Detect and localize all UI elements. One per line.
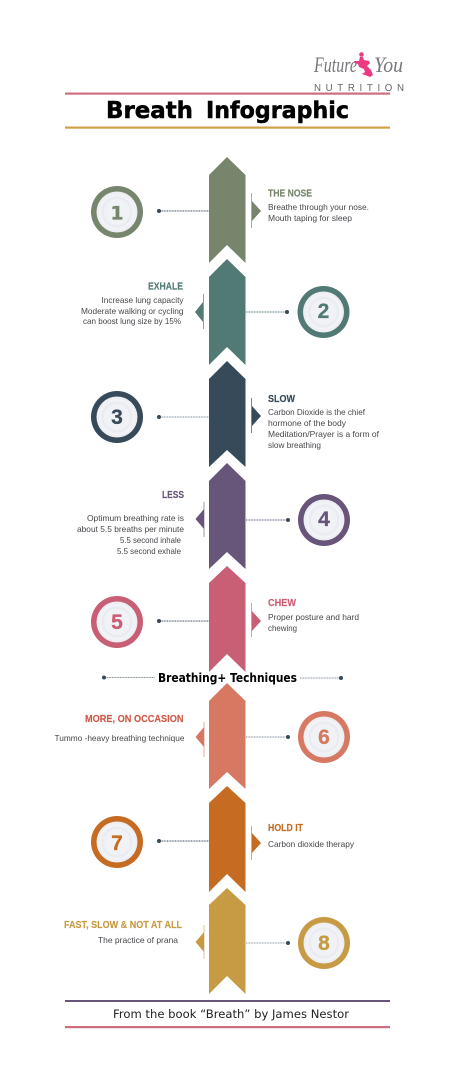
- step 1: the nose: Mouth taping for sleep: [268, 213, 352, 223]
- step 5: chew: CHEW: [268, 598, 297, 609]
- step 4: less: 5.5 second inhale: [120, 535, 181, 545]
- step 2: exhale: can boost lung size by 15%: [83, 316, 182, 326]
- step 6: more, on occasion: 6: [318, 726, 330, 749]
- logo: Future You Nutrition: Future: [313, 52, 357, 77]
- logo: Future You Nutrition: NUTRITION: [314, 83, 404, 94]
- footer source text: From the book “Breath” by James Nestor: [113, 1007, 349, 1021]
- step 2: exhale: Increase lung capacity: [102, 295, 184, 305]
- step 4: less: Optimum breathing rate is: [87, 513, 184, 523]
- title: Breath: [106, 98, 193, 124]
- step 3: slow: slow breathing: [268, 440, 321, 450]
- logo: Future You Nutrition: You: [374, 52, 403, 77]
- step 7: hold it: HOLD IT: [268, 823, 303, 834]
- footer top rule: [65, 1000, 390, 1002]
- step 4: less: LESS: [162, 490, 184, 501]
- title: Infographic: [206, 98, 349, 124]
- step 6: more, on occasion: [54, 711, 350, 763]
- step 2: exhale: Moderate walking or cycling: [81, 306, 184, 316]
- step 3: slow: Meditation/Prayer is a form of: [268, 429, 380, 439]
- footer bottom rule: [65, 1026, 390, 1028]
- top rule: [65, 92, 390, 95]
- step 5: chew: [91, 596, 359, 648]
- step 7: hold it: 7: [111, 832, 123, 855]
- step 6: more, on occasion: Tummo -heavy breathing technique: [54, 733, 185, 743]
- title rule: [65, 126, 390, 129]
- title: [106, 98, 349, 124]
- step 3: slow: 3: [111, 406, 123, 429]
- step 5: chew: chewing: [268, 623, 297, 633]
- chevron column: [209, 157, 246, 994]
- step 4: less: 5.5 second exhale: [117, 546, 181, 556]
- step 1: the nose: 1: [110, 202, 124, 224]
- step 1: the nose: Breathe through your nose.: [268, 202, 369, 212]
- step 3: slow: Carbon Dioxide is the chief: [268, 407, 366, 417]
- section heading: breathing techniques: Breathing+ Techniques: [158, 671, 297, 685]
- step 4: less: about 5.5 breaths per minute: [77, 524, 184, 534]
- step 8: fast, slow and not at all: The practice of prana: [98, 935, 178, 945]
- logo: Future You Nutrition: [313, 52, 404, 94]
- step 6: more, on occasion: MORE, ON OCCASION: [85, 714, 184, 725]
- step 1: the nose: [91, 186, 369, 238]
- step 1: the nose: THE NOSE: [268, 188, 312, 200]
- step 2: exhale: [81, 282, 350, 338]
- step 8: fast, slow and not at all: 8: [318, 932, 330, 955]
- step 7: hold it: Carbon dioxide therapy: [268, 839, 355, 849]
- step 4: less: 4: [318, 508, 330, 531]
- step 4: less: [77, 490, 350, 556]
- step 3: slow: SLOW: [268, 394, 296, 405]
- step 5: chew: Proper posture and hard: [268, 612, 359, 622]
- step 7: hold it: [91, 816, 355, 868]
- step 8: fast, slow and not at all: [64, 917, 350, 969]
- step 5: chew: 5: [111, 611, 123, 634]
- step 2: exhale: EXHALE: [148, 282, 183, 292]
- step 3: slow: hormone of the body: [268, 418, 347, 428]
- step 8: fast, slow and not at all: FAST, SLOW & NOT AT ALL: [64, 920, 182, 931]
- section heading: breathing techniques: [102, 671, 343, 685]
- step 3: slow: [91, 391, 380, 450]
- step 2: exhale: 2: [318, 300, 329, 323]
